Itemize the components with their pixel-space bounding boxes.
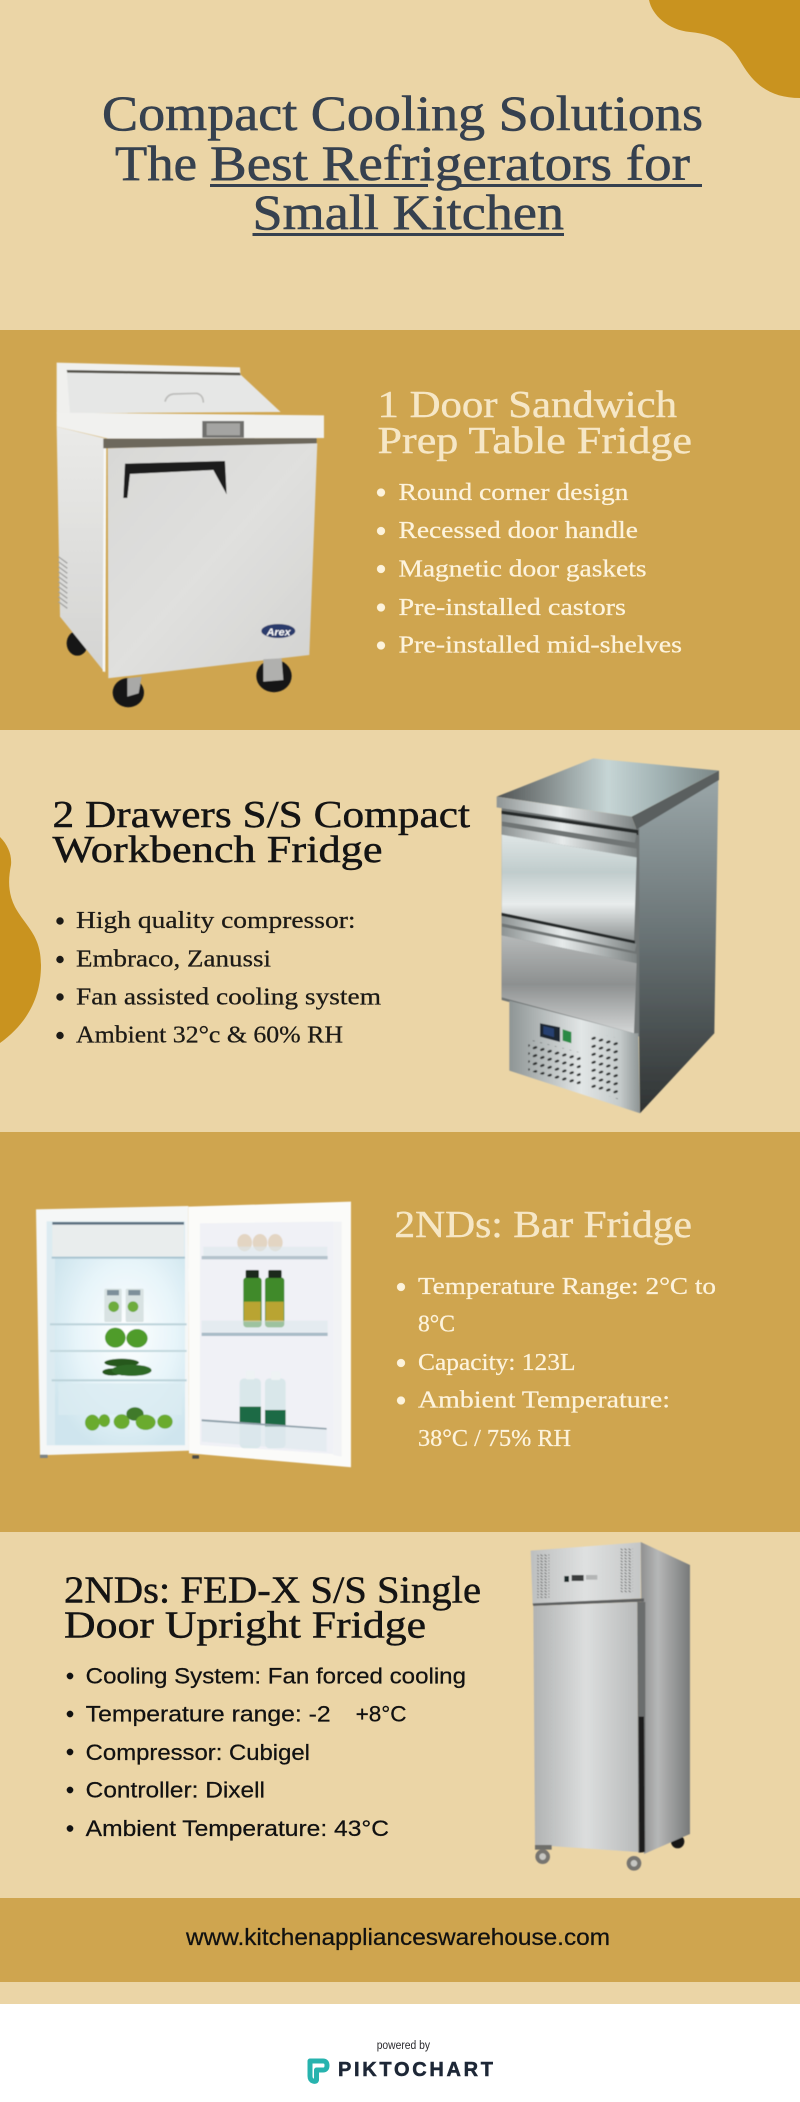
title: Compact Cooling Solutions [102,85,703,141]
feature list: Compressor: Cubigel [86,1740,310,1765]
title: Best Refrigerators for [210,135,690,191]
heading [64,1570,481,1646]
website banner [0,1898,800,1982]
image: sandwich prep fridge [57,363,324,707]
heading: 2NDs: Bar Fridge [394,1204,692,1246]
heading: Prep Table Fridge [378,420,692,462]
water bottles [240,1371,286,1448]
heading: Door Upright Fridge [64,1604,426,1646]
bottom door shelf [202,1419,327,1452]
feature list [397,1274,716,1452]
panel: upright fridge [64,1542,690,1871]
panel: 1 door sandwich prep table fridge [0,330,800,730]
panel: 2 drawers workbench fridge [52,758,719,1113]
feature list: 38°C / 75% RH [418,1426,571,1452]
feature list [377,480,682,659]
feature list: Temperature Range: 2°C to [418,1274,716,1300]
heading: 1 Door Sandwich [378,384,677,426]
heading: Workbench Fridge [52,829,382,871]
feature list [56,908,381,1049]
feature list: Cooling System: Fan forced cooling [86,1664,466,1689]
decorative blob: top right [649,0,800,98]
feature list: Ambient Temperature: 43°C [86,1816,389,1841]
green bottles [243,1270,284,1327]
image: stainless drawer fridge [497,758,719,1113]
feature list: Ambient 32°c & 60% RH [76,1023,343,1049]
feature list: Recessed door handle [398,518,638,544]
heading [52,794,471,871]
feature list: High quality compressor: [76,908,356,934]
title: The [115,135,197,191]
cucumbers [102,1359,152,1376]
image: upright stainless fridge [531,1542,690,1871]
panel: bar fridge [0,1132,800,1532]
heading: 2NDs: FED-X S/S Single [64,1570,481,1612]
feature list: Fan assisted cooling system [76,984,381,1010]
apples [105,1328,148,1348]
title: Small Kitchen [252,184,564,240]
website address: www.kitchenapplianceswarehouse.com [185,1924,610,1950]
feature list: +8°C [356,1702,407,1726]
wordmark: PIKTOCHART [338,2059,493,2081]
green apples in drawer [85,1407,173,1431]
feature list: 8°C [418,1312,455,1338]
icon: piktochart mark [310,2061,327,2081]
powered by label: powered by [377,2040,430,2052]
footer white area [0,2004,800,2102]
image: open bar fridge [36,1202,351,1467]
feature list: Embraco, Zanussi [76,947,271,973]
heading [378,384,692,462]
feature list: Round corner design [398,480,628,506]
feature list: Pre-installed castors [398,595,626,621]
Piktochart footer logo [310,2040,493,2081]
feature list: Capacity: 123L [418,1350,576,1376]
middle door shelf [202,1321,328,1336]
feature list: Controller: Dixell [86,1778,265,1803]
door shelf top with eggs [202,1234,328,1259]
heading: 2 Drawers S/S Compact [52,794,471,836]
feature list [67,1664,466,1841]
feature list: Ambient Temperature: [418,1388,670,1414]
feature list: Pre-installed mid-shelves [398,633,682,659]
feature list: Magnetic door gaskets [398,556,646,582]
feature list: Temperature range: -2 [86,1702,331,1726]
title [102,85,703,240]
cans [104,1289,144,1322]
image: sandwich prep fridge: Arex [266,627,291,638]
decorative blob: left [0,837,41,1043]
